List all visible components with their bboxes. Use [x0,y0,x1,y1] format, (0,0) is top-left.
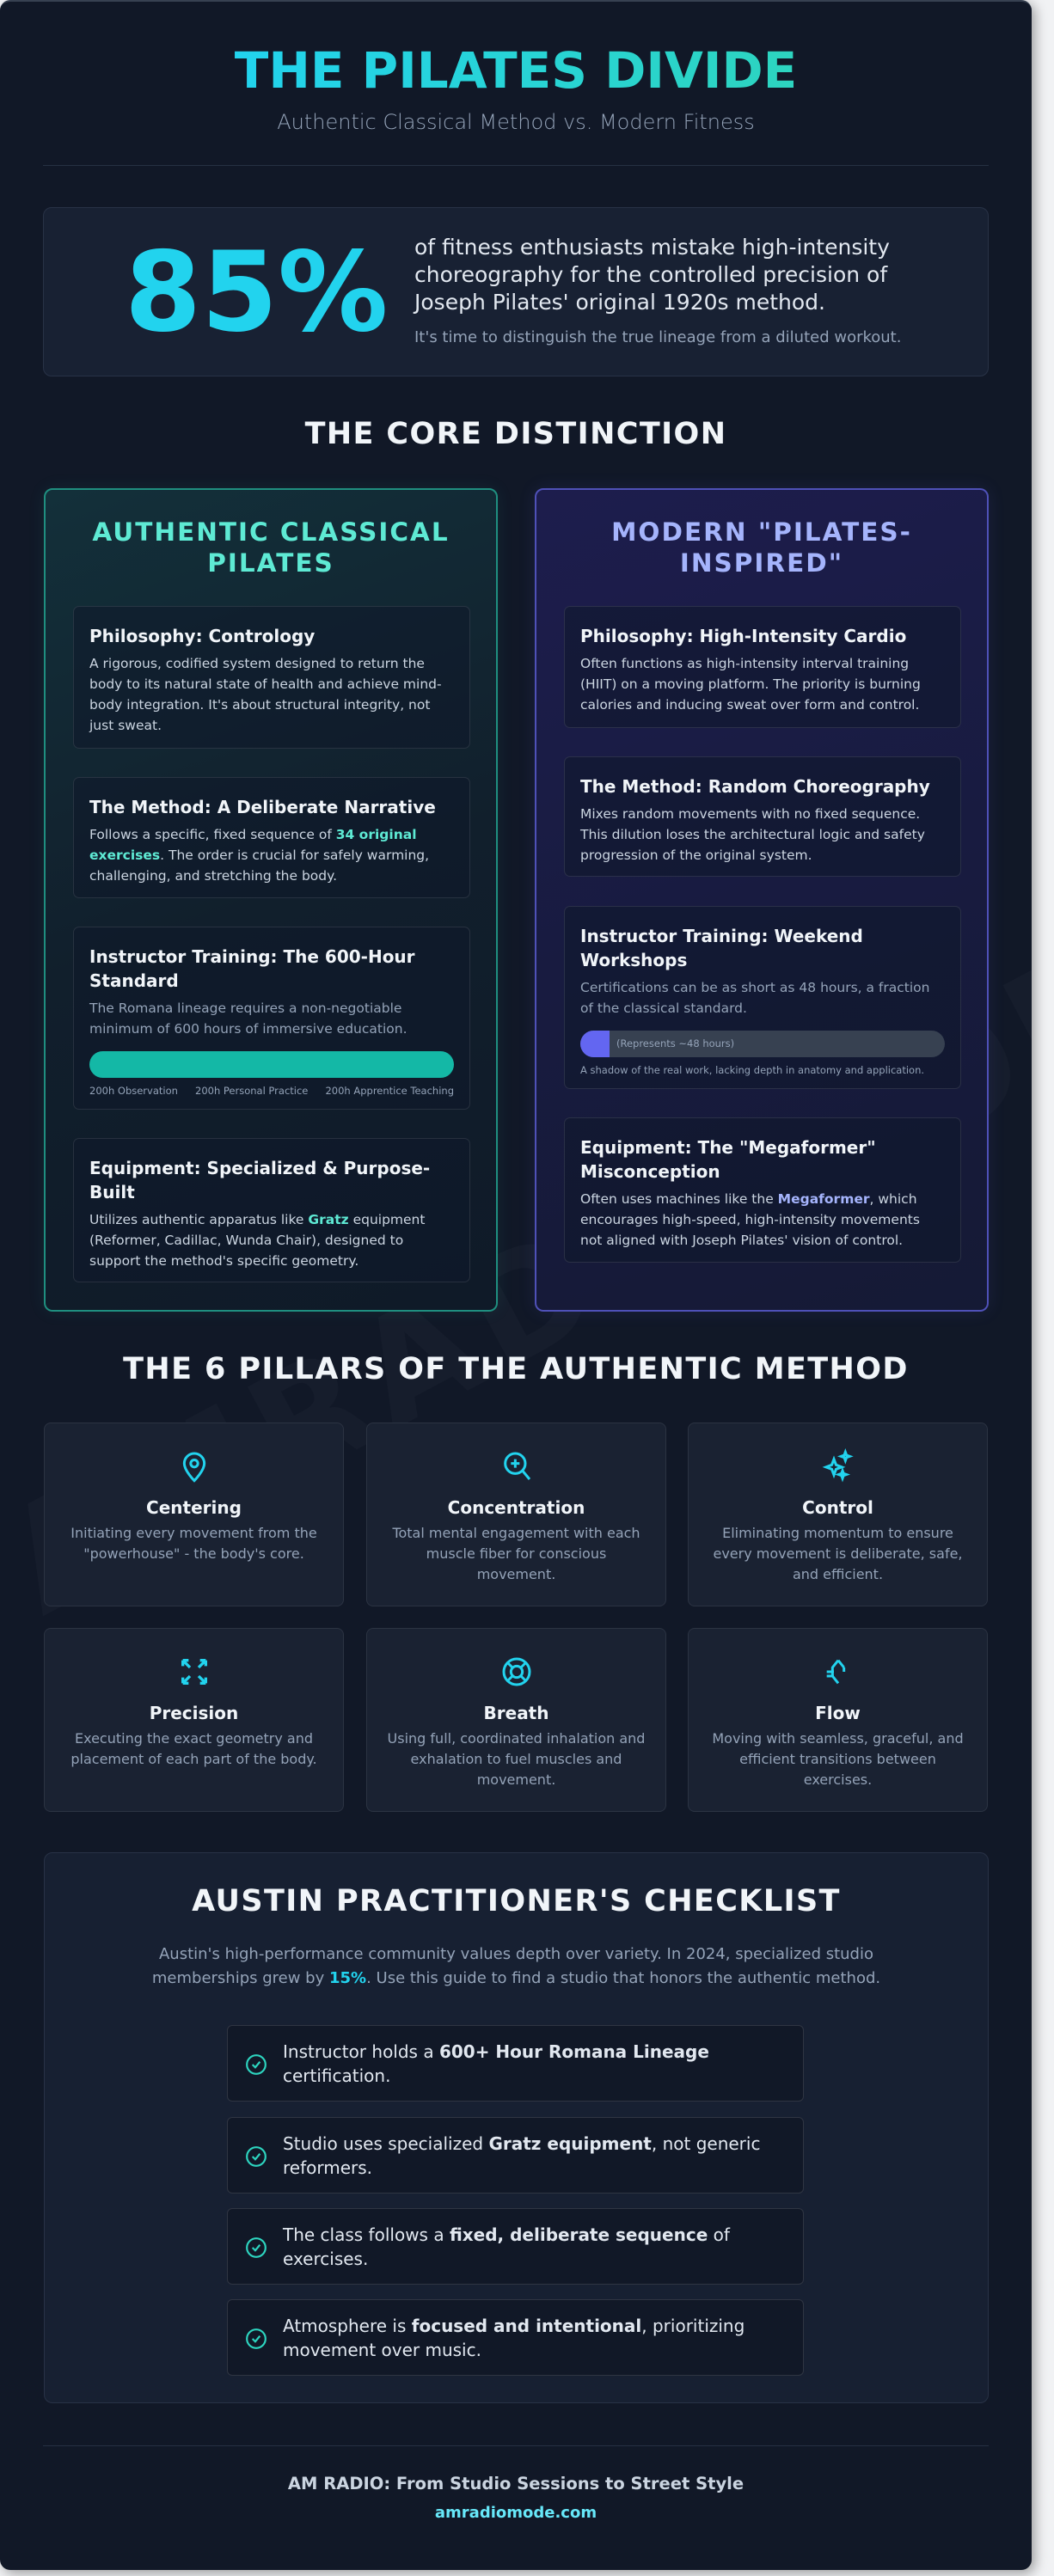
column heading: AUTHENTIC CLASSICAL [92,517,450,547]
card: training [73,927,470,1110]
stat text: of fitness enthusiasts mistake high-intensity choreography for the controlled precision of Joseph Pilates' original 1920s method. [414,235,890,315]
check item 4: Atmosphere is focused and intentional, prioritizing movement over music. [283,2316,745,2360]
card: method: Follows a specific, fixed sequence of 34 original exercises. The order is crucial for safely warming, challenging, and stretching the body. [89,827,429,884]
check item 1: Instructor holds a 600+ Hour Romana Lineage certification. [283,2041,709,2086]
card: philosophy: Philosophy: High-Intensity Cardio [580,626,906,646]
check item 2 [227,2117,804,2194]
card: method: Mixes random movements with no fixed sequence. This dilution loses the architectural logic and safety progression of the original system. [580,806,925,863]
check item 1 [227,2025,804,2102]
card: philosophy: Often functions as high-intensity interval training (HIIT) on a moving platform. The priority is burning calories and inducing sweat over form and control. [580,656,921,713]
card: training: 200h Personal Practice [195,1085,308,1097]
card: method [564,756,961,877]
pillar: breath [366,1628,666,1812]
pillar: control: Control [802,1497,873,1518]
check item 2: Studio uses specialized Gratz equipment, not generic reformers. [283,2133,760,2178]
pillar: precision: Precision [150,1703,238,1723]
subtitle: Authentic Classical Method vs. Modern Fitness [277,110,755,134]
card: training: Instructor Training: The 600-Hour Standard [89,946,415,991]
title: THE PILATES DIVIDE [235,41,797,100]
card: equipment: Equipment: Specialized & Purpose-Built [89,1158,430,1202]
column heading [92,517,450,578]
card: equipment: Often uses machines like the Megaformer, which encourages high-speed, high-intensity movements not aligned with Joseph Pilates' vision of control. [580,1191,920,1248]
big stat: 85% [125,229,388,357]
card: training: The Romana lineage requires a non-negotiable minimum of 600 hours of immersive education. [89,1000,408,1037]
pillar: precision: Executing the exact geometry and placement of each part of the body. [70,1730,317,1767]
panel: authentic classical [44,488,498,1312]
card: method: The Method: Random Choreography [580,776,930,797]
footer [288,2474,744,2522]
check item 3 [227,2208,804,2285]
card: training: 200h Observation [89,1085,178,1097]
pillar: flow: Moving with seamless, graceful, and efficient transitions between exercises. [712,1730,964,1788]
pillar: control [688,1423,988,1606]
pillar: centering [44,1423,344,1606]
pillar: concentration [366,1423,666,1606]
pillar: centering: Initiating every movement from the "powerhouse" - the body's core. [70,1525,317,1562]
pillar: control: Eliminating momentum to ensure every movement is deliberate, safe, and efficient. [713,1525,963,1582]
stat subtext: It's time to distinguish the true lineage from a diluted workout. [414,328,901,346]
pillar: breath: Using full, coordinated inhalation and exhalation to fuel muscles and movement. [388,1730,645,1788]
card: philosophy [73,606,470,749]
column heading: MODERN "PILATES- [611,517,912,547]
card: training: 200h Apprentice Teaching [325,1085,454,1097]
pillar: flow: Flow [815,1703,861,1723]
card: training: Certifications can be as short as 48 hours, a fraction of the classical standard. [580,980,929,1016]
footer: amradiomode.com [435,2504,597,2522]
card: method: The Method: A Deliberate Narrative [89,797,436,817]
card: equipment: Utilizes authentic apparatus like Gratz equipment (Reformer, Cadillac, Wunda Chair), designed to support the method's specific geometry. [89,1212,425,1269]
footer: AM RADIO: From Studio Sessions to Street Style [288,2474,744,2493]
pillar: concentration: Total mental engagement with each muscle fiber for conscious movement. [392,1525,640,1582]
checklist intro: Austin's high-performance community values depth over variety. In 2024, specialized studio memberships grew by 15%. Use this guide to find a studio that honors the authentic method. [152,1945,880,1987]
card: training: A shadow of the real work, lacking depth in anatomy and application. [580,1064,924,1076]
card: philosophy: A rigorous, codified system designed to return the body to its natural state of health and achieve mind-body integration. It's about structural integrity, not just sweat. [89,656,442,733]
card: training [564,906,961,1089]
panel: modern [535,488,989,1312]
card: method [73,777,470,898]
column heading [611,517,912,578]
heading: core distinction: THE CORE DISTINCTION [305,417,726,451]
pillar: concentration: Concentration [448,1497,585,1518]
pillar: precision [44,1628,344,1812]
stat panel [43,207,989,376]
card: philosophy: Philosophy: Contrology [89,626,315,646]
pillar: flow [688,1628,988,1812]
card: philosophy [564,606,961,728]
pillar: breath: Breath [484,1703,548,1723]
panel: checklist [44,1852,989,2403]
check item 4 [227,2299,804,2376]
card: training: Instructor Training: Weekend Workshops [580,926,863,970]
column heading: INSPIRED" [680,548,843,578]
pillar: centering: Centering [146,1497,242,1518]
card: equipment [564,1117,961,1263]
card: equipment [73,1138,470,1282]
progress bar 48h: (Represents ~48 hours) [616,1037,734,1049]
heading: pillars: THE 6 PILLARS OF THE AUTHENTIC METHOD [123,1352,909,1386]
progress bar 48h [580,1031,945,1057]
card: equipment: Equipment: The "Megaformer" Misconception [580,1137,876,1182]
column heading: PILATES [207,548,334,578]
checklist heading: AUSTIN PRACTITIONER'S CHECKLIST [192,1884,841,1918]
progress bar 600h [89,1051,454,1078]
check item 3: The class follows a fixed, deliberate sequence of exercises. [283,2224,730,2269]
